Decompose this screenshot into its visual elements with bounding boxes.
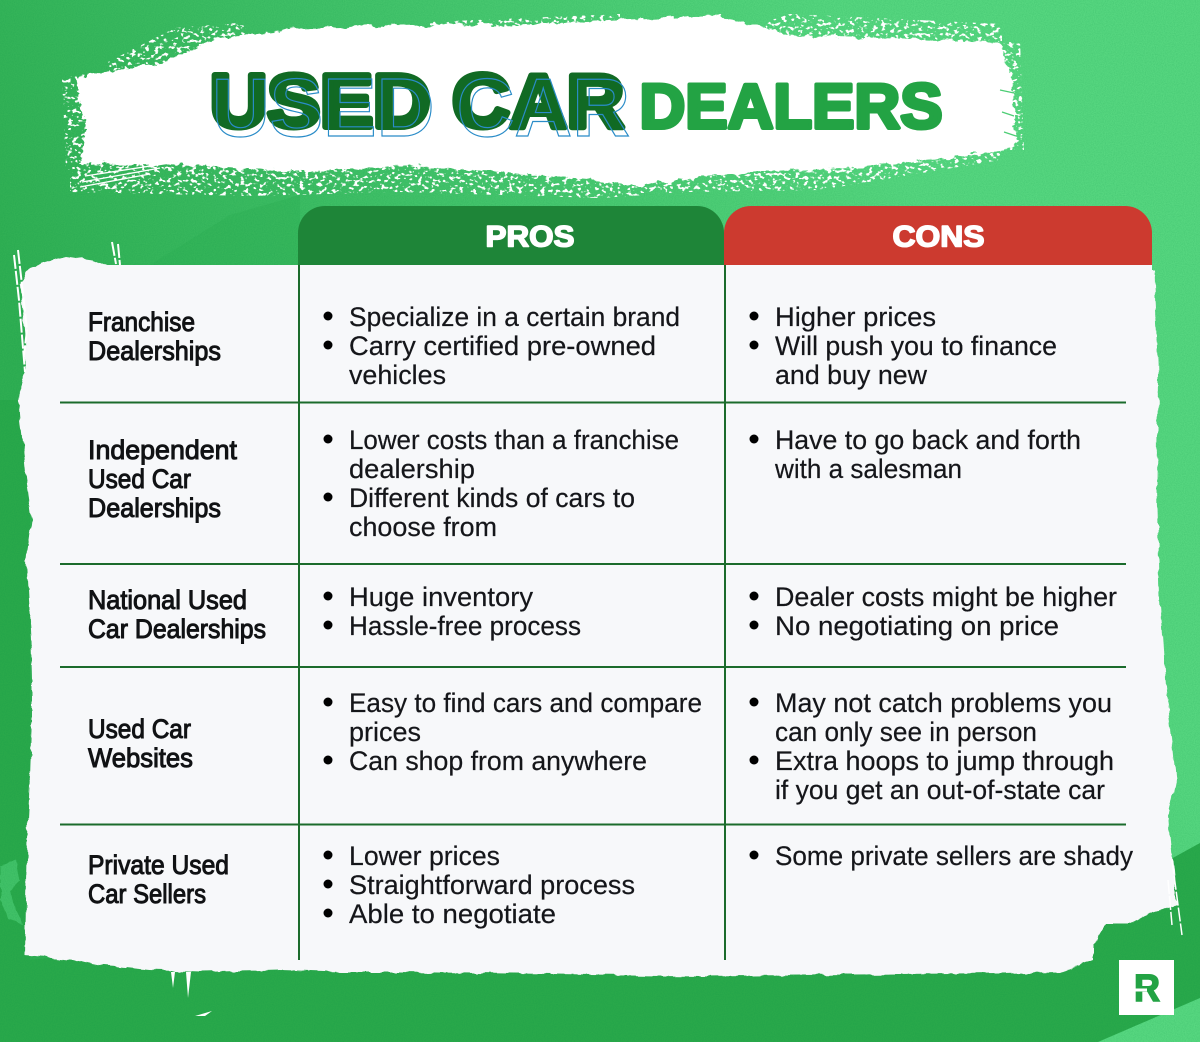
title: USED CAR solid: USED CAR: [210, 59, 624, 143]
cons list: Some private sellers are shady: [775, 841, 1134, 871]
cons list: May not catch problems you: [775, 688, 1112, 718]
pros list: Straightforward process: [349, 870, 635, 900]
row: private used car sellers: [88, 841, 1134, 929]
cons list: with a salesman: [774, 454, 962, 484]
cons list: Extra hoops to jump through: [775, 746, 1114, 776]
pros list: Huge inventory: [349, 582, 534, 612]
pros list: Hassle-free process: [349, 611, 581, 641]
cons list: if you get an out-of-state car: [775, 775, 1105, 805]
cons list: Will push you to finance: [775, 331, 1057, 361]
row: franchise dealerships: [88, 302, 1057, 390]
cons list: No negotiating on price: [775, 611, 1059, 641]
table grid lines: [60, 265, 1126, 960]
label: [88, 714, 193, 773]
cons list: Dealer costs might be higher: [775, 582, 1117, 612]
cons list: can only see in person: [775, 717, 1037, 747]
pros list: [324, 841, 635, 929]
title brush stroke: [62, 14, 1024, 198]
label: Independent: [88, 435, 237, 465]
pros list: Lower prices: [349, 841, 500, 871]
pros list: [324, 582, 581, 641]
cons list: [750, 688, 1114, 805]
label: [88, 307, 221, 366]
cons list: Have to go back and forth: [775, 425, 1081, 455]
cons list: and buy new: [775, 360, 928, 390]
icon: R logo: R: [1134, 968, 1160, 1010]
pros list: Easy to find cars and compare: [349, 688, 702, 718]
pros list: dealership: [349, 454, 475, 484]
label: [88, 585, 266, 644]
pros list: Carry certified pre-owned: [349, 331, 656, 361]
label: Dealerships: [88, 493, 221, 523]
pros list: [324, 425, 679, 542]
header: pros: PROS: [486, 220, 574, 254]
pros list: [324, 688, 702, 776]
label: [88, 435, 237, 523]
cons list: [750, 302, 1057, 390]
pros list: prices: [349, 717, 421, 747]
row: independent used car dealerships: [88, 425, 1081, 542]
label: Dealerships: [88, 336, 221, 366]
label: Used Car: [88, 714, 191, 744]
pros list: choose from: [349, 512, 497, 542]
cons list: [750, 582, 1117, 641]
cons list: [750, 425, 1081, 484]
main title: [210, 59, 942, 154]
label: National Used: [88, 585, 247, 615]
title: USED CAR outline: USED CAR: [212, 61, 630, 154]
pros list: [324, 302, 680, 390]
label: Private Used: [88, 850, 229, 880]
pros list: Lower costs than a franchise: [349, 425, 679, 455]
white table panel: [14, 242, 1182, 1016]
title: DEALERS: DEALERS: [640, 72, 942, 142]
label: Car Sellers: [88, 879, 206, 909]
cons list: Higher prices: [775, 302, 936, 332]
pros list: Can shop from anywhere: [349, 746, 647, 776]
pros list: Different kinds of cars to: [349, 483, 635, 513]
header: cons: [724, 206, 1152, 265]
label: Websites: [88, 743, 193, 773]
header: pros: [298, 206, 724, 265]
pros list: vehicles: [349, 360, 446, 390]
header: cons: CONS: [892, 220, 984, 254]
row: used car websites: [88, 688, 1114, 805]
label: Used Car: [88, 464, 191, 494]
label: Franchise: [88, 307, 195, 337]
label: [88, 850, 229, 909]
label: Car Dealerships: [88, 614, 266, 644]
icon: R logo: [1119, 960, 1174, 1015]
pros list: Specialize in a certain brand: [349, 302, 680, 332]
pros list: Able to negotiate: [349, 899, 556, 929]
row: national used car dealerships: [88, 582, 1117, 644]
